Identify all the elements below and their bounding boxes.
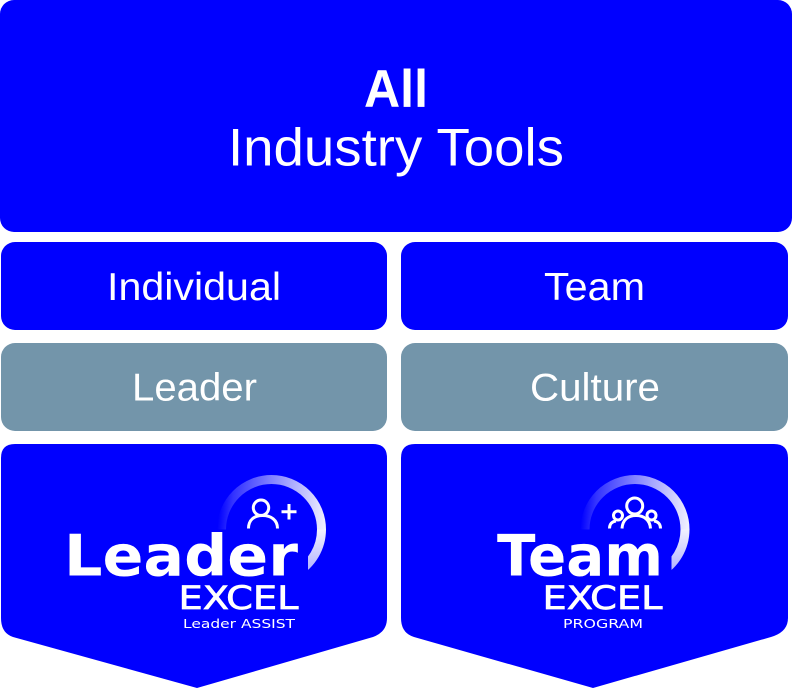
heading: All: All bbox=[364, 60, 428, 119]
panel: Individual: Individual bbox=[107, 266, 281, 309]
panel: All Industry Tools bbox=[0, 0, 792, 232]
icon: group of three people bbox=[610, 498, 660, 528]
label: PROGRAM: PROGRAM bbox=[563, 616, 643, 631]
panel: Team: Team bbox=[544, 266, 645, 309]
logo word: EXCEL: EXCEL bbox=[542, 579, 663, 617]
logo word: EXCEL: EXCEL bbox=[178, 579, 299, 617]
logo word: Leader: Leader bbox=[64, 524, 298, 590]
logo word: Team: Team bbox=[497, 524, 663, 590]
label: Leader ASSIST: Leader ASSIST bbox=[183, 616, 295, 631]
icon: gradient arc bbox=[585, 480, 685, 573]
panel: Team bbox=[401, 242, 788, 330]
heading: Industry Tools: Industry Tools bbox=[228, 118, 564, 178]
icon: gradient arc bbox=[222, 480, 322, 573]
panel: Leader: Leader bbox=[132, 366, 257, 410]
icon: person with plus bbox=[248, 500, 296, 528]
panel: Individual bbox=[1, 242, 387, 330]
panel: Culture: Culture bbox=[530, 366, 660, 410]
panel: Team Excel badge bbox=[401, 444, 788, 688]
panel: Leader Excel badge bbox=[1, 444, 387, 688]
panel: Culture bbox=[401, 343, 788, 431]
panel: Leader bbox=[1, 343, 387, 431]
